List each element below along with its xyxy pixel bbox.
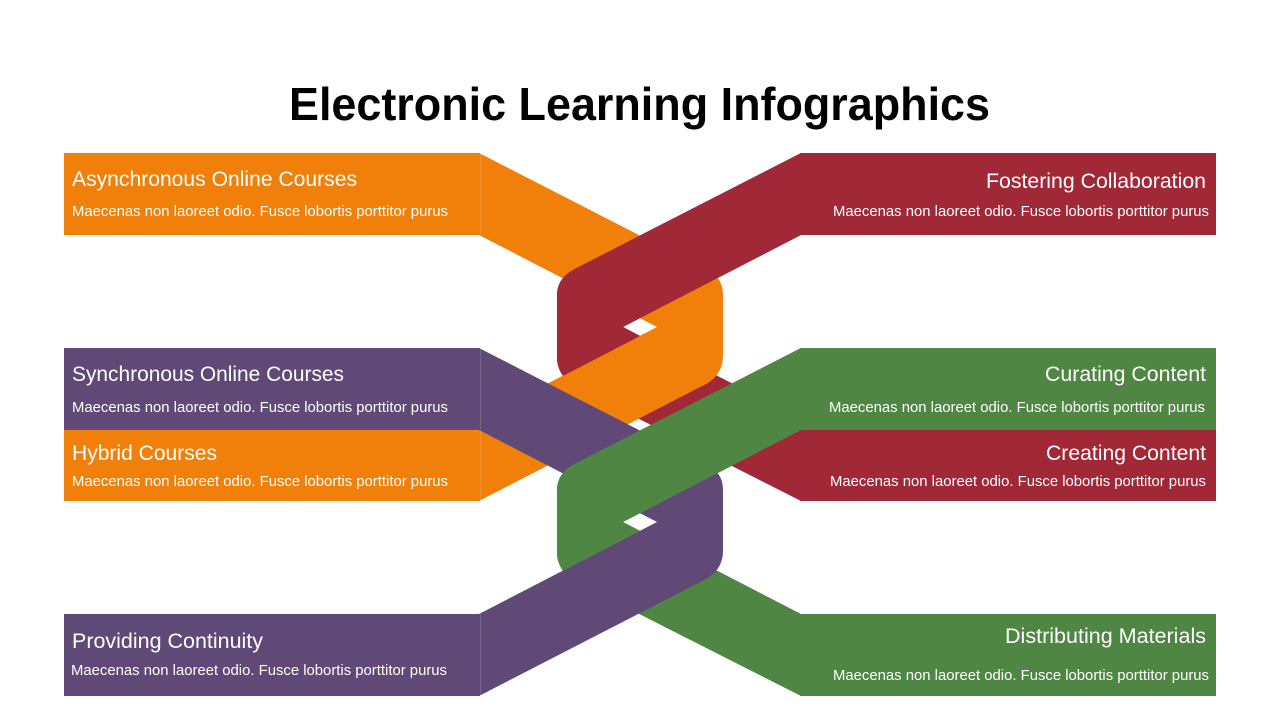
panel text: Curating Content: Maecenas non laoreet odio. Fusce lobortis porttitor purus <box>829 400 1205 416</box>
ribbon: orange full loop <box>64 153 723 501</box>
title: Electronic Learning Infographics <box>289 78 990 130</box>
ribbon: red upper strand over orange <box>557 153 801 375</box>
panel text: Fostering Collaboration <box>833 170 1209 220</box>
panel text: Creating Content: Creating Content <box>1046 442 1206 465</box>
ribbon: purple full loop <box>64 348 723 696</box>
ribbon: green full loop <box>557 348 1216 696</box>
panel text: Synchronous Online Courses <box>72 363 448 416</box>
panel text: Distributing Materials: Distributing Materials <box>1005 625 1206 648</box>
panel text: Providing Continuity: Maecenas non laoreet odio. Fusce lobortis porttitor purus <box>71 663 447 679</box>
panel text: Hybrid Courses <box>72 442 448 490</box>
panel text: Asynchronous Online Courses: Asynchronous Online Courses <box>72 168 357 191</box>
panel text: Providing Continuity <box>71 630 447 679</box>
panel text: Providing Continuity: Providing Continuity <box>72 630 264 653</box>
panel text: Synchronous Online Courses: Maecenas non laoreet odio. Fusce lobortis porttitor purus <box>72 400 448 416</box>
panel text: Fostering Collaboration: Fostering Collaboration <box>986 170 1206 193</box>
panel text: Asynchronous Online Courses: Maecenas non laoreet odio. Fusce lobortis porttitor purus <box>72 204 448 220</box>
ribbon: red full loop <box>557 153 1216 501</box>
panel text: Distributing Materials: Maecenas non laoreet odio. Fusce lobortis porttitor purus <box>833 668 1209 684</box>
panel text: Curating Content: Curating Content <box>1045 363 1206 386</box>
ribbon group: lower knot (green and purple) <box>64 348 1216 696</box>
panel text: Hybrid Courses: Maecenas non laoreet odio. Fusce lobortis porttitor purus <box>72 474 448 490</box>
panel text: Curating Content <box>829 363 1206 416</box>
panel text: Creating Content: Maecenas non laoreet odio. Fusce lobortis porttitor purus <box>830 474 1206 490</box>
panel text: Distributing Materials <box>833 625 1209 684</box>
panel text: Asynchronous Online Courses <box>72 168 448 220</box>
ribbon group: upper knot (red and orange) <box>64 153 1216 501</box>
panel text: Creating Content <box>830 442 1206 490</box>
ribbon: green upper strand over purple <box>557 348 801 570</box>
panel text: Fostering Collaboration: Maecenas non laoreet odio. Fusce lobortis porttitor purus <box>833 204 1209 220</box>
panel text: Hybrid Courses: Hybrid Courses <box>72 442 217 465</box>
panel text: Synchronous Online Courses: Synchronous Online Courses <box>72 363 344 386</box>
